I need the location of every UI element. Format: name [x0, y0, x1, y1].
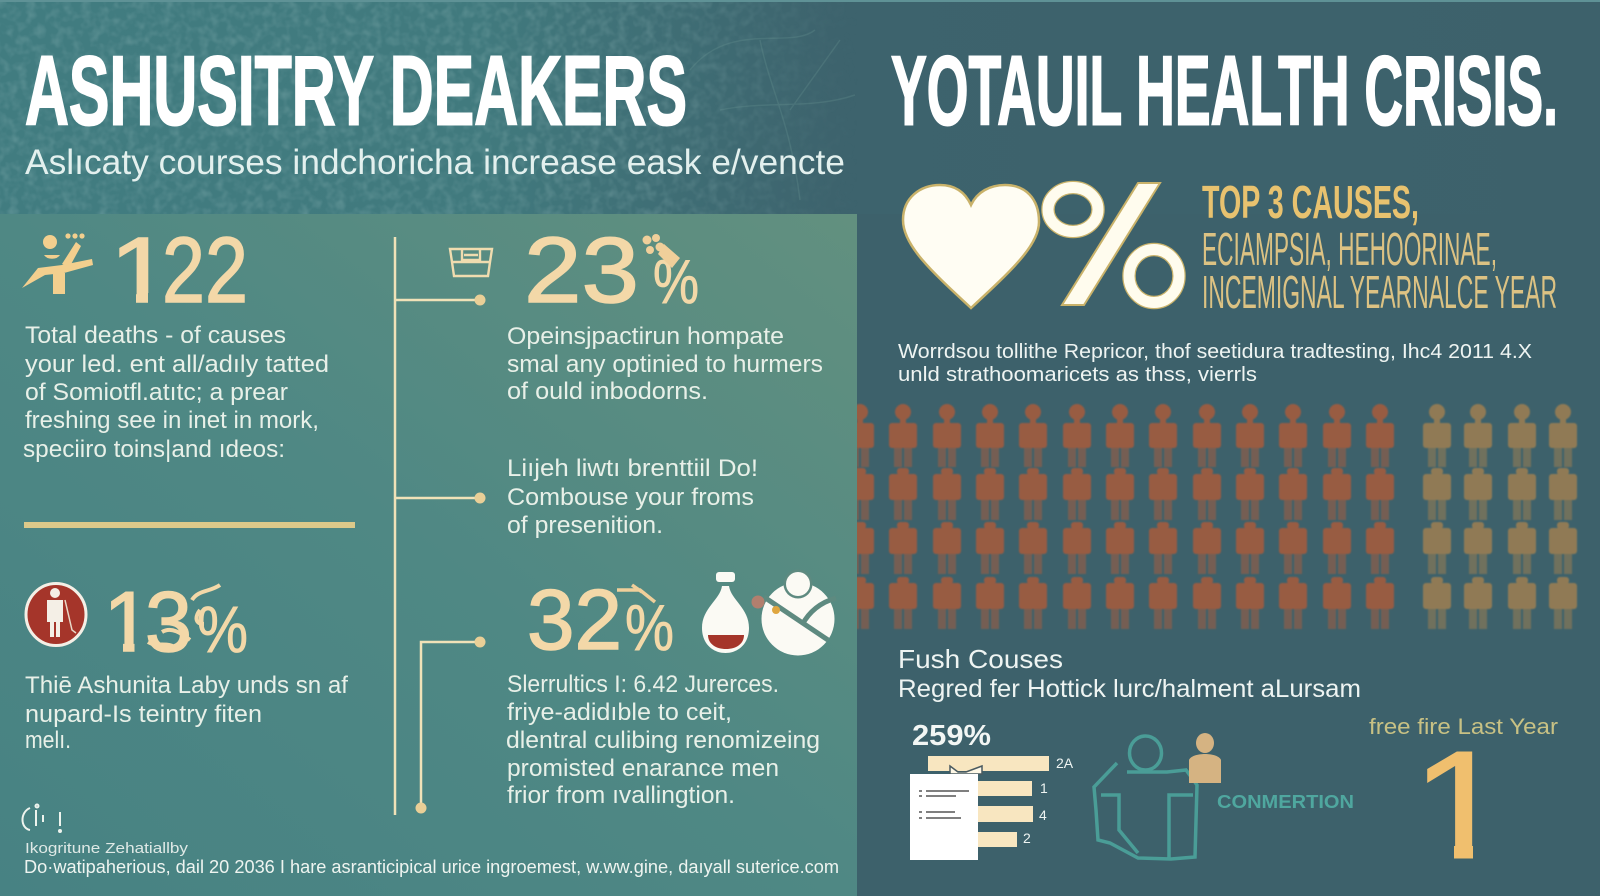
stat: 122: [119, 236, 245, 303]
text block: total deaths: freshing see in inet in mork,: [25, 407, 319, 434]
text block: total deaths: [23, 322, 329, 463]
icon: figure with diagonal band: [752, 570, 836, 656]
icon: percent sign: [1048, 183, 1179, 305]
text block: combouse: of presenition.: [507, 512, 663, 539]
title left: ASHUSITRY DEAKERS: [25, 36, 687, 146]
description text: Worrdsou tollithe Repricor, thof seetidura tradtesting, Ihc4 2011 4.X: [898, 340, 1532, 363]
stat: 32%: [527, 573, 674, 668]
text block: opening statement: Opeinsjpactirun hompate: [507, 323, 784, 350]
text block: combouse: Combouse your froms: [507, 484, 754, 511]
label: last year: free fire Last Year: [1369, 714, 1558, 739]
bar chart with document: [910, 720, 1074, 860]
text block: opening statement: of ould inbodorns.: [507, 378, 708, 405]
stat: 32%: 32: [527, 573, 622, 668]
label: connection: CONMERTION: [1217, 792, 1354, 812]
text block: slerrultics: [506, 671, 820, 809]
text block: total deaths: Total deaths - of causes: [25, 322, 286, 349]
stat: 13%: [111, 583, 246, 653]
bar chart with document: 1: [1040, 780, 1048, 796]
section heading: fush couses: Regred fer Hottick lurc/halment aLursam: [898, 675, 1361, 703]
footer icon: [22, 804, 61, 832]
text block: ashunita: [25, 672, 348, 754]
stat: 122: 22: [162, 218, 248, 322]
stat: 13%: 3: [145, 575, 192, 670]
text block: ashunita: melı.: [25, 727, 71, 754]
stat: 32%: %: [625, 591, 674, 664]
text block: slerrultics: friye-adidıble to ceit,: [507, 699, 732, 726]
text block: ashunita: nupard-Is teintry fiten: [25, 701, 262, 728]
section heading: fush couses: [898, 644, 1361, 703]
stat: 13%: %: [197, 592, 248, 666]
header band with texture: [0, 0, 1600, 214]
bar chart with document: 2A: [1056, 755, 1074, 771]
causes heading: TOP 3 CAUSES,: [1202, 176, 1419, 228]
text block: slerrultics: promisted enarance men: [507, 755, 779, 782]
icon: figure with branch: [22, 233, 93, 294]
footer credit: Ikogritune Zehatiallby: [25, 840, 189, 857]
text block: combouse: [507, 455, 758, 539]
bar chart with document: 2: [1023, 830, 1031, 846]
stat: 23%: [524, 218, 699, 322]
bar chart with document: 4: [1039, 807, 1047, 823]
text block: ashunita: Thiē Ashunita Laby unds sn af: [25, 672, 348, 699]
description text: [898, 340, 1532, 386]
text block: total deaths: your led. ent all/adıly tatted: [25, 351, 329, 378]
stat: 23%: 23: [524, 218, 639, 322]
text block: opening statement: [507, 323, 823, 405]
text block: opening statement: smal any optinied to hurmers: [507, 351, 823, 378]
text block: total deaths: speciiro toins|and ıdeos:: [23, 436, 285, 463]
timeline connector: [395, 237, 486, 815]
icon: bottle: [702, 572, 749, 653]
section heading: fush couses: Fush Couses: [898, 644, 1063, 674]
text block: slerrultics: Slerrultics I: 6.42 Jurerces.: [507, 671, 779, 698]
icon: person in red circle: [26, 584, 86, 646]
stat: 13%: 1: [104, 575, 152, 670]
text block: slerrultics: frior from ıvallingtion.: [507, 782, 735, 809]
people pictogram grid: [846, 404, 1577, 629]
subtitle: Aslıcaty courses indchoricha increase eask e/vencte: [25, 143, 845, 182]
stat: big 1: 1: [1410, 719, 1510, 891]
stat: 23%: %: [653, 248, 699, 317]
icon: heart: [903, 185, 1039, 308]
footer source line: Do·watipaherious, dail 20 2036 I hare asranticipical urice ingroemest, w.ww.gine, daıyall suterice.com: [24, 857, 839, 877]
icon: teal outline figure with small person: [1094, 733, 1221, 859]
text block: total deaths: of Somiotfl.atıtc; a prear: [25, 379, 288, 406]
text block: combouse: Liıjeh liwtı brenttiil Do!: [507, 455, 758, 482]
stat: 122: 1: [110, 218, 172, 322]
bar chart value: 259%: [912, 720, 991, 752]
panel: left statistics: [0, 214, 857, 896]
description text: unld strathoomaricets as thss, vierrls: [898, 363, 1257, 386]
text block: slerrultics: dlentral culibing renomizeing: [506, 727, 820, 754]
icon: storage bin: [450, 249, 492, 276]
icon: document: [910, 774, 978, 860]
divider bar: [24, 522, 355, 528]
causes heading: [1202, 176, 1557, 318]
